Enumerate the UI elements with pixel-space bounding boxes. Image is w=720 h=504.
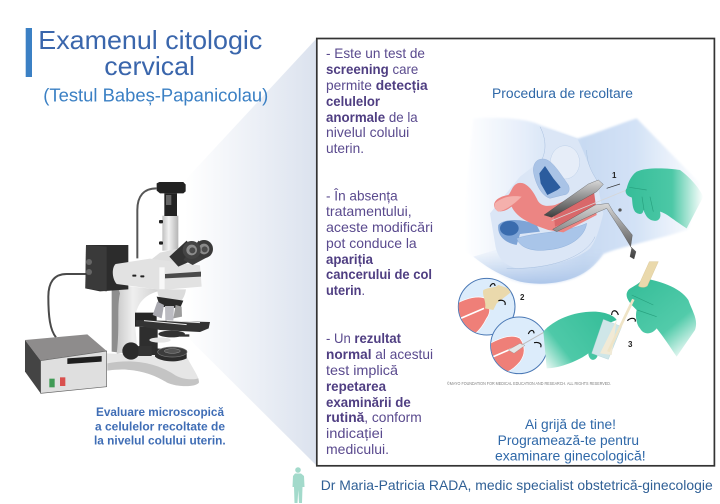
illustration: cell collection steps xyxy=(457,262,696,375)
icon: microscope with power supply xyxy=(25,182,213,393)
panel: main information box xyxy=(317,38,714,466)
heading: sampling procedure: Procedura de recoltare xyxy=(492,86,633,101)
text block: normal result: repetarea xyxy=(326,378,386,394)
text block: normal result: rutină, conform xyxy=(326,409,422,425)
callout: schedule a gynecological exam: examinare ginecologică! xyxy=(495,449,646,464)
text block: risk without treatment: apariția xyxy=(326,251,373,267)
illustration: speculum examination xyxy=(460,118,703,284)
footer: author credit: Dr Maria-Patricia RADA, medic specialist obstetrică-ginecologie xyxy=(321,477,713,493)
title xyxy=(26,25,268,106)
caption: microscopic evaluation xyxy=(94,407,226,448)
title line 1: Examenul citologic xyxy=(38,25,262,55)
caption: microscopic evaluation: Evaluare microscopică xyxy=(96,407,225,419)
text block: definition: screening care xyxy=(326,61,419,77)
subtitle: (Testul Babeș-Papanicolau) xyxy=(43,86,268,106)
text block: definition: permite detecția xyxy=(326,77,428,93)
label: step 1: 1 xyxy=(612,171,617,180)
text block: definition: celulelor xyxy=(326,93,381,109)
caption: microscopic evaluation: a celulelor recoltate de xyxy=(95,422,225,434)
text block: risk without treatment: aceste modificări xyxy=(326,219,433,235)
callout: schedule a gynecological exam xyxy=(495,417,646,464)
text block: normal result: indicației xyxy=(326,425,383,441)
callout: schedule a gynecological exam: Ai grijă de tine! xyxy=(525,417,616,432)
text block: definition: nivelul colului xyxy=(326,124,409,140)
text block: normal result: normal al acestui xyxy=(326,346,433,362)
label: step 2: 2 xyxy=(520,293,525,302)
label: step 3: 3 xyxy=(628,340,633,349)
text block: normal result: examinării de xyxy=(326,394,411,410)
caption: microscopic evaluation: la nivelul colului uterin. xyxy=(94,436,226,448)
title accent bar xyxy=(26,28,32,77)
text block: risk without treatment: pot conduce la xyxy=(326,235,417,251)
text block: definition: uterin. xyxy=(326,140,364,156)
text block: definition: - Este un test de xyxy=(326,45,425,61)
text block: risk without treatment: - În absența xyxy=(326,188,398,204)
text block: normal result: test implică xyxy=(326,362,398,378)
callout: schedule a gynecological exam: Programează-te pentru xyxy=(498,433,639,448)
text block: risk without treatment: uterin. xyxy=(326,282,365,298)
text block: normal result xyxy=(326,330,433,457)
text block: definition: anormale de la xyxy=(326,109,418,125)
copyright note: ©MAYO FOUNDATION FOR MEDICAL EDUCATION AND RESEARCH. ALL RIGHTS RESERVED. xyxy=(447,381,611,386)
text block: risk without treatment: tratamentului, xyxy=(326,203,412,219)
text block: definition xyxy=(326,45,428,156)
title line 2: cervical xyxy=(104,51,195,81)
text block: risk without treatment: cancerului de col xyxy=(326,266,432,282)
text block: risk without treatment xyxy=(326,188,433,298)
text block: normal result: - Un rezultat xyxy=(326,330,401,346)
icon: doctor figure xyxy=(292,467,304,503)
background cone of light xyxy=(150,38,317,466)
text block: normal result: medicului. xyxy=(326,441,389,457)
